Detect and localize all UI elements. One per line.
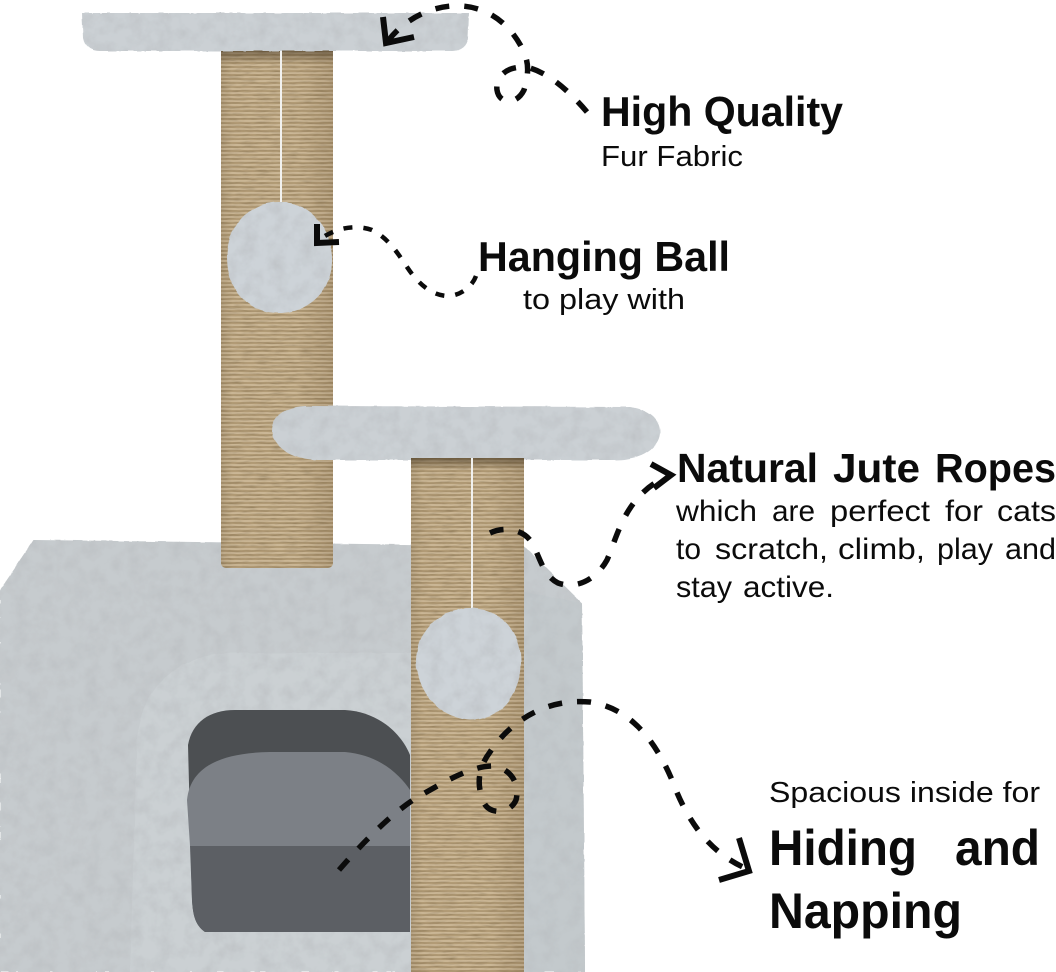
arrow: jute ropes <box>490 464 671 585</box>
arrow: high quality to top platform <box>383 6 587 112</box>
description: and <box>1005 533 1056 566</box>
heading: Natural <box>677 445 818 491</box>
description: cats <box>997 495 1056 528</box>
description: perfect <box>830 495 931 528</box>
heading: Jute <box>833 445 920 491</box>
callout: hiding and napping <box>769 777 1040 939</box>
arrow: hanging ball <box>317 224 476 296</box>
top platform <box>82 13 469 51</box>
callout: hanging ball <box>478 233 730 316</box>
callout: natural jute ropes <box>675 445 1056 604</box>
heading: High Quality <box>601 88 844 135</box>
description: for <box>945 495 983 528</box>
heading: Hiding <box>769 820 917 876</box>
back scratching post <box>221 45 333 568</box>
description <box>675 495 1056 604</box>
description: which <box>675 495 757 528</box>
intro line: Spacious inside for <box>769 777 1040 809</box>
cat tree product illustration <box>0 13 660 972</box>
subtext: to play with <box>523 284 685 316</box>
heading <box>769 820 1040 939</box>
description: active. <box>743 571 834 604</box>
description: climb, <box>838 533 925 566</box>
entrance opening with cushion <box>187 710 410 932</box>
description: scratch, <box>715 533 828 566</box>
description: to <box>676 533 701 566</box>
entrance surround <box>130 653 415 972</box>
description: play <box>937 533 993 566</box>
description: are <box>772 495 815 528</box>
lower platform <box>272 406 660 460</box>
arrow: hiding and napping <box>339 702 749 880</box>
heading: and <box>955 820 1040 876</box>
heading: Hanging Ball <box>478 233 730 280</box>
callout: high quality <box>601 88 844 173</box>
description: stay <box>676 571 732 604</box>
heading: Napping <box>769 883 962 939</box>
front scratching post <box>411 458 524 972</box>
hanging string, lower <box>471 458 473 610</box>
hanging string, upper <box>280 51 282 202</box>
lower hanging ball <box>416 608 521 720</box>
upper hanging ball <box>227 202 332 313</box>
condo box with fur texture <box>0 540 585 972</box>
subtext: Fur Fabric <box>601 141 743 173</box>
